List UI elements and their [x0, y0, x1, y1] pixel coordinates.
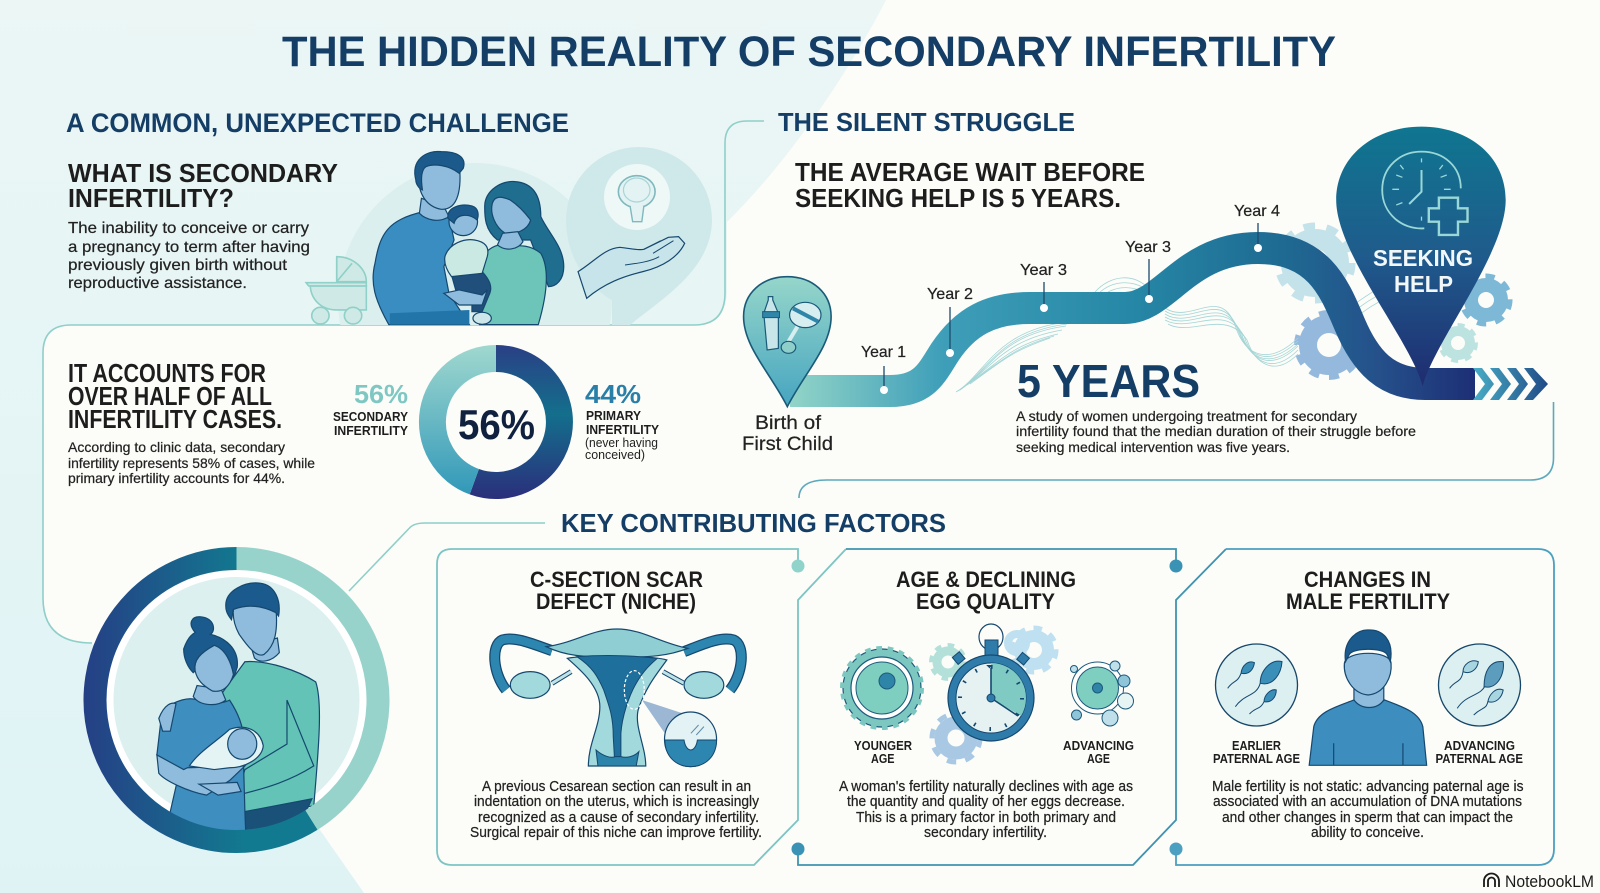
card title: C-SECTION SCAR — [530, 567, 703, 592]
heading: accounts for over half — [68, 358, 282, 434]
label: seeking help: HELP — [1394, 271, 1453, 297]
icon: advancing paternal sperm — [1438, 644, 1520, 726]
icon: younger egg — [842, 648, 922, 728]
heading: what is secondary infertility — [68, 158, 338, 213]
year labels: Year 3 — [1125, 239, 1171, 256]
card title — [896, 567, 1076, 614]
legend: primary infertility: 44% — [585, 379, 641, 409]
definition text: reproductive assistance. — [68, 275, 247, 292]
label: advancing age — [1063, 739, 1134, 766]
clinic data text — [68, 439, 315, 486]
year labels: Year 1 — [861, 344, 906, 361]
year markers — [880, 223, 1262, 394]
section heading: THE SILENT STRUGGLE — [778, 107, 1075, 137]
title: THE HIDDEN REALITY OF SECONDARY INFERTILITY — [282, 28, 1336, 76]
panel: the silent struggle — [742, 107, 1554, 498]
donut chart: 56 percent: 56% — [458, 401, 535, 448]
legend: primary infertility: INFERTILITY — [586, 422, 659, 437]
chevrons — [1473, 368, 1548, 400]
legend: secondary infertility: 56% — [354, 379, 408, 409]
icon: advancing egg — [1070, 661, 1134, 726]
card title: CHANGES IN — [1304, 567, 1431, 592]
connector to key factors — [349, 523, 545, 591]
card text: indentation on the uterus, which is increasingly — [474, 794, 760, 810]
card: changes in male fertility — [1170, 549, 1554, 865]
section heading: A COMMON, UNEXPECTED CHALLENGE — [66, 108, 569, 138]
label: younger age: AGE — [871, 752, 894, 766]
card outline — [1176, 549, 1554, 865]
label: advancing age: ADVANCING — [1063, 739, 1134, 753]
ring: dark segment — [95, 558, 311, 842]
heading: accounts for over half: INFERTILITY CASES. — [68, 404, 282, 434]
icon: stroller — [306, 257, 366, 324]
illustration: man — [1309, 630, 1427, 765]
label: birth of first child — [742, 413, 833, 455]
label: birth of first child: First Child — [742, 434, 833, 455]
card text: Surgical repair of this niche can improve fertility. — [470, 825, 762, 841]
card text: ability to conceive. — [1311, 825, 1424, 841]
statement: average wait — [795, 157, 1145, 213]
study text: infertility found that the median duration of their struggle before — [1016, 423, 1416, 439]
card outline — [437, 549, 846, 865]
card text: This is a primary factor in both primary and — [856, 810, 1116, 826]
year labels: Year 4 — [1234, 203, 1280, 220]
connector dot — [1170, 842, 1182, 856]
clinic data text: primary infertility accounts for 44%. — [68, 470, 285, 486]
heading: what is secondary infertility: INFERTILITY? — [68, 183, 234, 213]
card title — [1286, 567, 1450, 614]
watermark: NotebookLM: NotebookLM — [1505, 872, 1594, 891]
legend: secondary infertility — [333, 379, 408, 438]
gears behind timeline — [1278, 226, 1510, 377]
statement: average wait: THE AVERAGE WAIT BEFORE — [795, 157, 1145, 187]
heading: accounts for over half: IT ACCOUNTS FOR — [68, 358, 266, 388]
clinic data text: infertility represents 58% of cases, while — [68, 455, 315, 471]
illustration backdrop — [338, 147, 712, 325]
definition text — [68, 220, 310, 292]
heading: accounts for over half: OVER HALF OF ALL — [68, 381, 272, 411]
label: advancing paternal age — [1436, 739, 1523, 766]
donut chart: 56 percent — [432, 358, 559, 486]
year labels: Year 2 — [927, 286, 973, 303]
legend: primary infertility: (never having — [585, 436, 658, 450]
card text: Male fertility is not static: advancing paternal age is — [1212, 779, 1524, 795]
illustration: uterus with niche inset — [495, 629, 741, 767]
heading: key contributing factors: KEY CONTRIBUTING FACTORS — [561, 508, 946, 538]
label: seeking help — [1373, 245, 1473, 297]
timeline ribbon — [790, 248, 1475, 391]
clinic data text: According to clinic data, secondary — [68, 439, 285, 455]
icon: stopwatch — [948, 624, 1034, 741]
connector outline — [799, 402, 1554, 498]
panel: a common, unexpected challenge — [43, 108, 764, 643]
study text: A study of women undergoing treatment for secondary — [1016, 408, 1357, 424]
card: c-section scar defect — [437, 549, 846, 865]
card text: and other changes in sperm that can impact the — [1222, 810, 1513, 826]
connector dot — [792, 560, 804, 572]
card outline — [798, 549, 1226, 865]
legend: primary infertility: conceived) — [585, 448, 645, 462]
connector dots — [792, 560, 1182, 856]
legend: secondary infertility: SECONDARY — [333, 409, 408, 424]
illustration: family with child — [373, 151, 564, 325]
study text — [1016, 408, 1416, 455]
definition text: previously given birth without — [68, 257, 288, 274]
card text: associated with an accumulation of DNA mutations — [1213, 794, 1522, 810]
card text: secondary infertility. — [924, 825, 1047, 841]
card text — [1212, 779, 1524, 841]
legend: primary infertility — [585, 379, 659, 462]
definition text: The inability to conceive or carry — [68, 220, 309, 237]
card title: AGE & DECLINING — [896, 567, 1076, 592]
card: age and declining egg quality — [792, 549, 1226, 865]
card title — [530, 567, 703, 614]
label: earlier paternal age: PATERNAL AGE — [1213, 752, 1300, 766]
definition text: a pregnancy to term after having — [68, 239, 310, 256]
card text — [470, 779, 762, 841]
card title: MALE FERTILITY — [1286, 589, 1450, 614]
background tint region — [0, 0, 886, 893]
label: younger age: YOUNGER — [854, 739, 912, 753]
couple figures — [157, 583, 319, 861]
year labels: Year 3 — [1020, 262, 1067, 279]
panel outline — [43, 121, 764, 643]
legend: secondary infertility: INFERTILITY — [334, 423, 408, 438]
label: earlier paternal age — [1213, 739, 1300, 766]
study text: seeking medical intervention was five years. — [1016, 439, 1290, 455]
panel: over half of all cases — [68, 358, 659, 486]
card text: the quantity and quality of her eggs decrease. — [847, 794, 1125, 810]
label: advancing paternal age: ADVANCING — [1444, 739, 1515, 753]
ring: light segment — [236, 558, 378, 820]
card title: DEFECT (NICHE) — [536, 589, 696, 614]
label: seeking help: SEEKING — [1373, 245, 1473, 271]
icon: bulb in hand — [578, 176, 685, 298]
illustration: couple with newborn in ring — [95, 558, 378, 861]
big stat: 5 years: 5 YEARS — [1017, 355, 1200, 407]
icon: birth pin with bottle and rattle — [744, 277, 831, 407]
card text: A previous Cesarean section can result in an — [482, 779, 751, 795]
card title: EGG QUALITY — [916, 589, 1055, 614]
label: advancing age: AGE — [1087, 752, 1110, 766]
statement: average wait: SEEKING HELP IS 5 YEARS. — [795, 183, 1121, 213]
year labels — [861, 203, 1280, 361]
label: birth of first child: Birth of — [755, 413, 822, 434]
icon: seeking help pin — [1336, 127, 1506, 386]
heading: what is secondary infertility: WHAT IS SECONDARY — [68, 158, 338, 188]
label: earlier paternal age: EARLIER — [1232, 739, 1281, 753]
card text: A woman's fertility naturally declines with age as — [839, 779, 1133, 795]
gears around stopwatch — [931, 628, 1056, 762]
label: younger age — [854, 739, 912, 766]
card text: recognized as a cause of secondary infertility. — [478, 810, 759, 826]
card text — [839, 779, 1133, 841]
label: advancing paternal age: PATERNAL AGE — [1436, 752, 1523, 766]
icon: earlier paternal sperm — [1216, 644, 1298, 726]
decorative wave bundles — [956, 278, 1385, 392]
legend: primary infertility: PRIMARY — [586, 408, 641, 423]
